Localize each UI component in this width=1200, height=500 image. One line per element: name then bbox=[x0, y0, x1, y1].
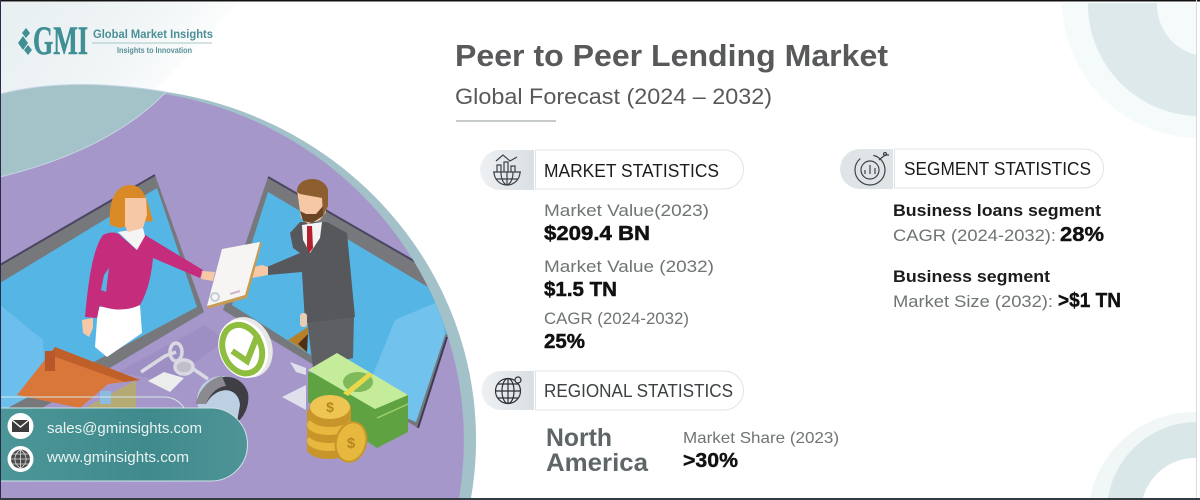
illustration: lending scene in circle bbox=[0, 84, 500, 498]
magnifier bbox=[196, 376, 248, 424]
subtitle: Global Forecast (2024 – 2032) bbox=[455, 84, 772, 109]
market statistics header pill: MARKET STATISTICS bbox=[544, 160, 719, 181]
region name bbox=[546, 424, 649, 477]
panel: regional statistics bbox=[482, 371, 839, 477]
cagr bbox=[544, 310, 689, 353]
business loans segment bbox=[893, 201, 1104, 246]
business loans segment: Business loans segment bbox=[893, 201, 1101, 220]
market statistics header pill bbox=[480, 150, 743, 190]
logo: Global Market Insights bbox=[93, 27, 213, 41]
woman bbox=[82, 185, 215, 357]
document bbox=[207, 242, 262, 309]
contact panel bbox=[0, 397, 248, 481]
keys bbox=[141, 343, 208, 392]
title: Peer to Peer Lending Market bbox=[455, 38, 888, 73]
business segment: >$1 TN bbox=[1058, 290, 1121, 312]
icon: globe bbox=[8, 446, 34, 472]
floor shadow and papers bbox=[118, 325, 306, 410]
regional statistics header pill bbox=[482, 371, 744, 410]
coins bbox=[307, 395, 371, 465]
check badge bbox=[209, 309, 282, 386]
market value 2023 bbox=[544, 202, 709, 245]
segment statistics header pill bbox=[840, 149, 1104, 189]
panel: market statistics bbox=[480, 150, 743, 353]
panel: segment statistics bbox=[840, 149, 1121, 312]
logo: GMI bbox=[33, 18, 88, 63]
coins: $ bbox=[326, 399, 334, 415]
segment statistics header pill: SEGMENT STATISTICS bbox=[904, 158, 1091, 179]
house bbox=[17, 347, 140, 410]
logo: Insights to Innovation bbox=[117, 46, 192, 55]
money stack bbox=[308, 353, 408, 448]
decoration: bottom-right arcs bbox=[1090, 412, 1196, 498]
background: top-left tint bbox=[0, 2, 240, 95]
market share bbox=[683, 430, 839, 472]
market share: >30% bbox=[683, 450, 738, 472]
business segment: Business segment bbox=[893, 267, 1050, 286]
business loans segment: 28% bbox=[1060, 224, 1104, 246]
logo bbox=[18, 18, 213, 63]
business segment: Market Size (2032): bbox=[893, 293, 1053, 311]
market value 2032: Market Value (2032) bbox=[544, 258, 714, 276]
coins: $ bbox=[347, 435, 356, 452]
right tablet bbox=[223, 176, 448, 428]
business loans segment: CAGR (2024-2032): bbox=[893, 227, 1056, 245]
website text: www.gminsights.com bbox=[46, 450, 189, 466]
cagr: CAGR (2024-2032) bbox=[544, 310, 689, 328]
market value 2023: Market Value(2023) bbox=[544, 202, 709, 220]
email text: sales@gminsights.com bbox=[47, 421, 202, 437]
man bbox=[248, 179, 355, 368]
region name: America bbox=[546, 449, 649, 477]
business segment bbox=[893, 267, 1121, 312]
market share: Market Share (2023) bbox=[683, 430, 839, 447]
teal corner shape bbox=[0, 84, 166, 177]
cagr: 25% bbox=[544, 330, 585, 353]
left tablet bbox=[0, 175, 204, 433]
region name: North bbox=[546, 424, 612, 452]
icon: envelope bbox=[8, 413, 34, 439]
regional statistics header pill: REGIONAL STATISTICS bbox=[544, 380, 733, 401]
market value 2023: $209.4 BN bbox=[544, 222, 650, 245]
decoration: top-right arcs bbox=[1062, 3, 1196, 138]
market value 2032: $1.5 TN bbox=[544, 278, 617, 301]
market value 2032 bbox=[544, 258, 714, 301]
